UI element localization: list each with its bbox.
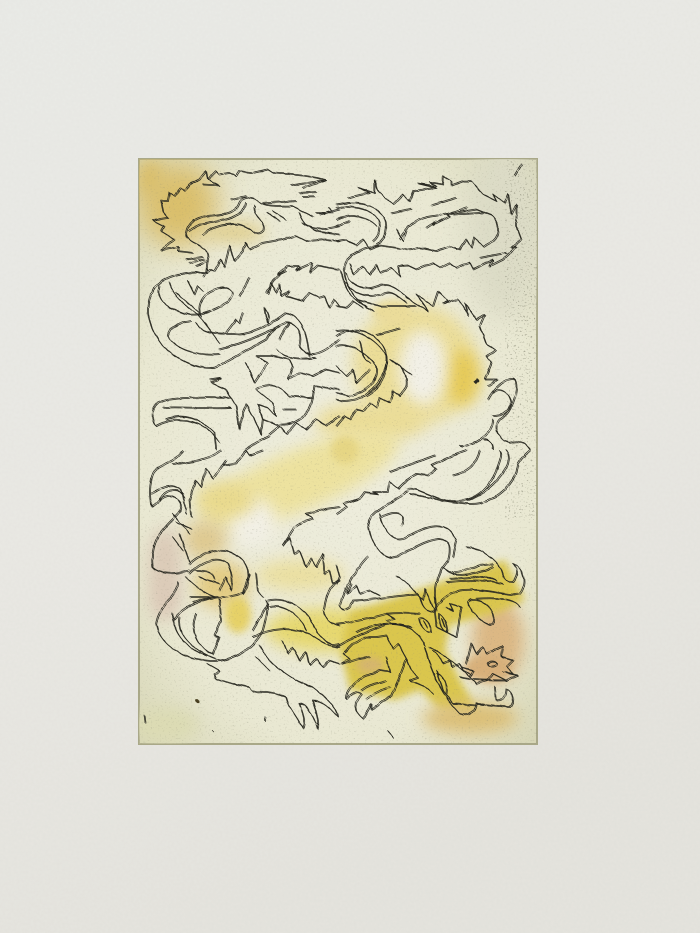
- dragon: upper right, tail and flank: [336, 164, 529, 449]
- dragon: lower left, smoke, haunch and hind leg: [144, 450, 339, 730]
- dragon: upper left, mane and smoke: [147, 169, 339, 449]
- dragon: lower right, head, antlers and claws: [336, 450, 529, 737]
- etching plate with watercolor: [131, 140, 545, 745]
